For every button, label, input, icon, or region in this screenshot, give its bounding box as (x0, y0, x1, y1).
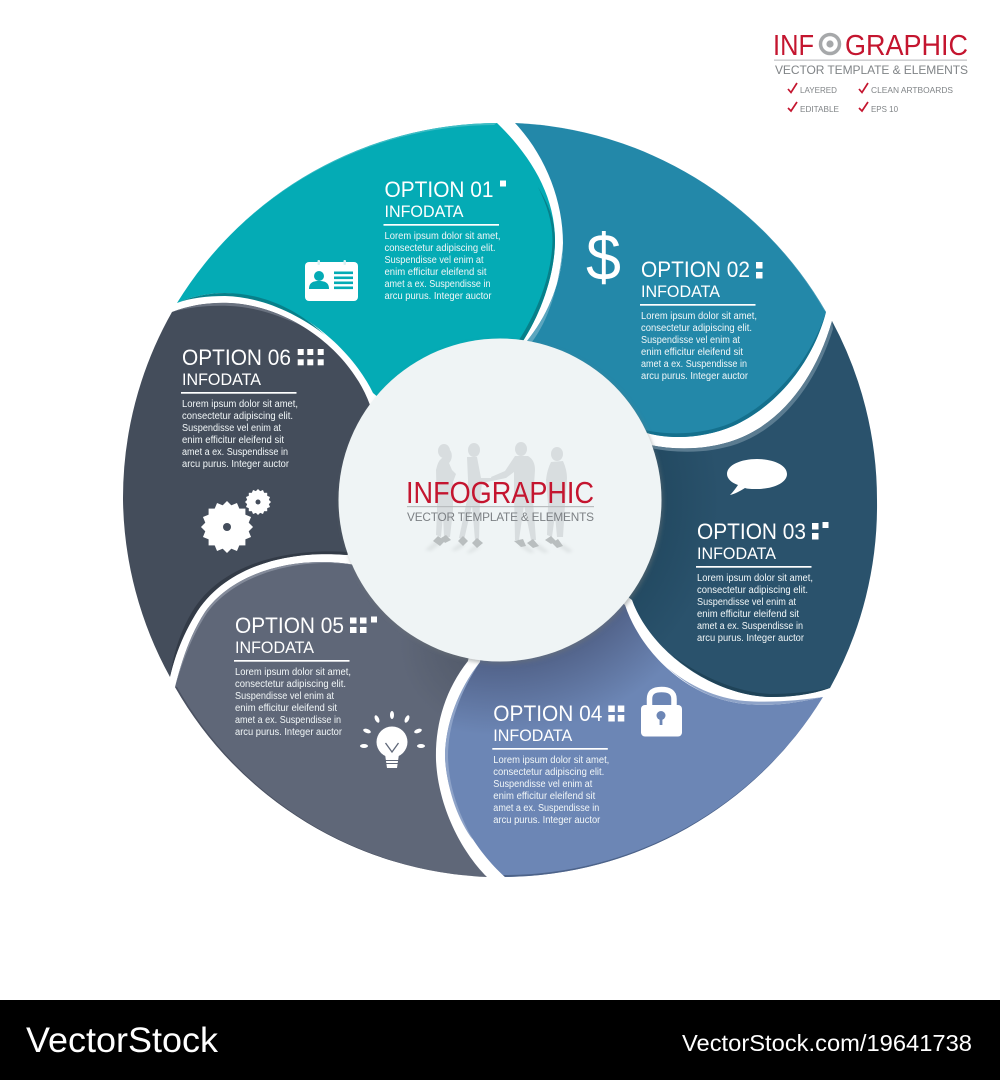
heading: option 03: Lorem ipsum dolor sit amet, (697, 573, 813, 584)
icon: gears (201, 489, 271, 553)
panel: option 03 petal (500, 321, 877, 697)
heading: option 03: consectetur adipiscing elit. (697, 585, 808, 596)
people feet (433, 535, 563, 548)
footer url: VectorStock.com/19641738 (682, 1030, 972, 1056)
heading: option 03: enim efficitur eleifend sit (697, 609, 799, 620)
heading: option 03: Suspendisse vel enim at (697, 597, 796, 608)
logo title (773, 30, 968, 62)
heading: option 02: arcu purus. Integer auctor (641, 371, 749, 382)
heading: option 02: consectetur adipiscing elit. (641, 323, 752, 334)
heading: option 01 (384, 177, 506, 302)
heading: option 01: enim efficitur eleifend sit (384, 267, 487, 278)
heading: option 01: consectetur adipiscing elit. (384, 243, 496, 254)
heading: option 06: Lorem ipsum dolor sit amet, (182, 399, 298, 410)
panel: option 02 petal (500, 123, 826, 500)
heading: option 03: INFODATA (697, 544, 777, 563)
heading: option 05: INFODATA (235, 638, 315, 657)
heading: option 04: Lorem ipsum dolor sit amet, (493, 755, 609, 766)
panel: option 04 petal (445, 500, 823, 877)
feature checklist: EDITABLE (800, 104, 839, 114)
feature checklist: LAYERED (800, 85, 837, 95)
feature checklist: EPS 10 (871, 104, 898, 114)
heading: option 04: OPTION 04 (493, 701, 602, 726)
heading: option 06: amet a ex. Suspendisse in (182, 447, 288, 458)
heading: option 04: consectetur adipiscing elit. (493, 767, 604, 778)
icon: light bulb (360, 711, 425, 768)
heading: option 06: arcu purus. Integer auctor (182, 459, 290, 470)
heading: option 04: INFODATA (493, 726, 573, 745)
heading: option 01: amet a ex. Suspendisse in (384, 279, 490, 290)
heading: option 02: enim efficitur eleifend sit (641, 347, 743, 358)
foot shadows (425, 541, 573, 553)
heading: option 06: enim efficitur eleifend sit (182, 435, 284, 446)
center title: INFOGRAPHIC (406, 475, 594, 510)
heading: option 01: OPTION 01 (384, 177, 494, 202)
heading: option 02: Lorem ipsum dolor sit amet, (641, 311, 757, 322)
heading: option 03: amet a ex. Suspendisse in (697, 621, 803, 632)
heading: option 04: amet a ex. Suspendisse in (493, 803, 599, 814)
heading: option 01: arcu purus. Integer auctor (384, 291, 492, 302)
heading: option 02: amet a ex. Suspendisse in (641, 359, 747, 370)
center subtitle: VECTOR TEMPLATE & ELEMENTS (407, 510, 594, 524)
icon: id card (305, 260, 358, 301)
heading: option 01: Lorem ipsum dolor sit amet, (384, 231, 500, 242)
panel: option 01 petal (177, 123, 555, 500)
heading: option 05: Lorem ipsum dolor sit amet, (235, 667, 351, 678)
heading: option 05: OPTION 05 (235, 613, 344, 638)
logo title: INF (773, 30, 814, 62)
panel: center circle (338, 338, 662, 662)
heading: option 05: arcu purus. Integer auctor (235, 727, 343, 738)
heading: option 06: OPTION 06 (182, 345, 291, 370)
icon: padlock (641, 690, 682, 736)
footer bar (0, 1000, 1000, 1080)
icon: dollar sign: $ (586, 220, 621, 294)
heading: option 02: OPTION 02 (641, 257, 750, 282)
panel: option 05 petal (175, 500, 500, 877)
logo title: GRAPHIC (845, 30, 968, 62)
heading: option 02: INFODATA (641, 282, 721, 301)
heading: option 04 (492, 701, 624, 826)
heading: option 04: Suspendisse vel enim at (493, 779, 593, 790)
heading: option 03: OPTION 03 (697, 519, 806, 544)
feature checklist: CLEAN ARTBOARDS (871, 85, 953, 95)
logo subtitle: VECTOR TEMPLATE & ELEMENTS (775, 63, 968, 77)
heading: option 04: arcu purus. Integer auctor (493, 815, 601, 826)
heading: option 02: Suspendisse vel enim at (641, 335, 740, 346)
heading: option 06: INFODATA (182, 370, 262, 389)
logo block top right (773, 30, 968, 114)
footer brand: VectorStock (26, 1021, 219, 1060)
heading: option 05: consectetur adipiscing elit. (235, 679, 346, 690)
heading: option 02 (640, 257, 762, 382)
heading: option 05: Suspendisse vel enim at (235, 691, 334, 702)
icon: speech bubble (727, 459, 787, 495)
heading: option 03: arcu purus. Integer auctor (697, 633, 805, 644)
heading: option 01: Suspendisse vel enim at (384, 255, 484, 266)
heading: option 01: INFODATA (384, 202, 464, 221)
heading: option 05: enim efficitur eleifend sit (235, 703, 337, 714)
heading: option 03 (696, 519, 828, 644)
heading: option 05 (234, 613, 377, 738)
people silhouettes (436, 442, 567, 540)
heading: option 06 (181, 345, 324, 470)
heading: option 05: amet a ex. Suspendisse in (235, 715, 341, 726)
heading: option 06: consectetur adipiscing elit. (182, 411, 293, 422)
feature checklist (788, 83, 953, 114)
heading: option 04: enim efficitur eleifend sit (493, 791, 596, 802)
panel: option 06 petal (123, 303, 500, 677)
heading: option 06: Suspendisse vel enim at (182, 423, 281, 434)
